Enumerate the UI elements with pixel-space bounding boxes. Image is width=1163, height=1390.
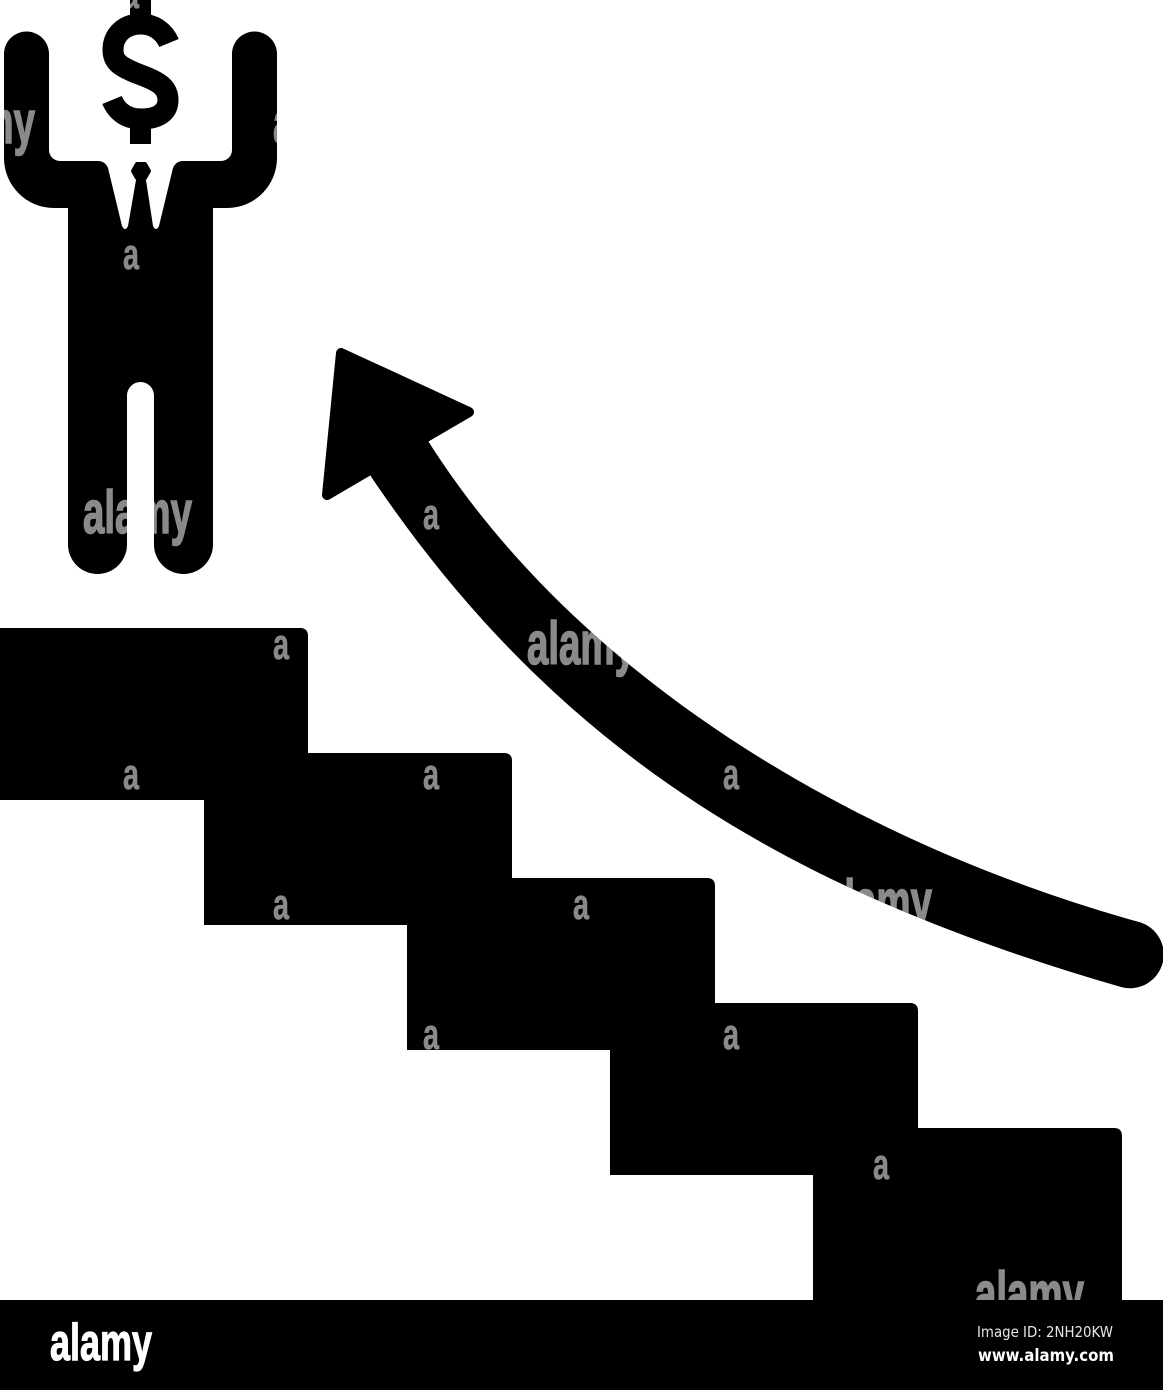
watermarks: a bbox=[123, 230, 139, 279]
watermarks: a bbox=[273, 880, 289, 929]
curved arrow bbox=[327, 353, 1163, 988]
body with raised arms and legs bbox=[4, 32, 277, 574]
dollar bars bbox=[130, 0, 151, 144]
image id text: Image ID: 2NH20KW bbox=[977, 1323, 1113, 1341]
watermarks: alamy bbox=[273, 89, 382, 156]
watermarks: alamy bbox=[83, 479, 192, 546]
alamy logo text: alamy bbox=[50, 1314, 152, 1372]
watermarks: alamy bbox=[823, 868, 932, 935]
dollar curve bbox=[112, 24, 169, 119]
watermarks: a bbox=[273, 620, 289, 669]
watermarks: a bbox=[573, 880, 589, 929]
watermarks: a bbox=[423, 1010, 439, 1059]
watermarks: a bbox=[723, 750, 739, 799]
bottom black band bbox=[0, 1300, 1163, 1390]
watermarks: a bbox=[423, 750, 439, 799]
tie knot bbox=[133, 164, 149, 178]
watermarks: a bbox=[123, 750, 139, 799]
watermarks: alamy bbox=[527, 610, 636, 677]
website text: www.alamy.com bbox=[978, 1346, 1114, 1366]
arrow head bbox=[327, 353, 469, 495]
arrow shaft bbox=[362, 428, 1163, 988]
watermarks: a bbox=[723, 1010, 739, 1059]
watermarks: a bbox=[423, 490, 439, 539]
staircase bbox=[0, 628, 1122, 1300]
businessman figure bbox=[4, 0, 277, 574]
watermarks: alamy bbox=[975, 1260, 1084, 1327]
dollar sign bbox=[112, 0, 169, 144]
watermarks: a bbox=[873, 1140, 889, 1189]
